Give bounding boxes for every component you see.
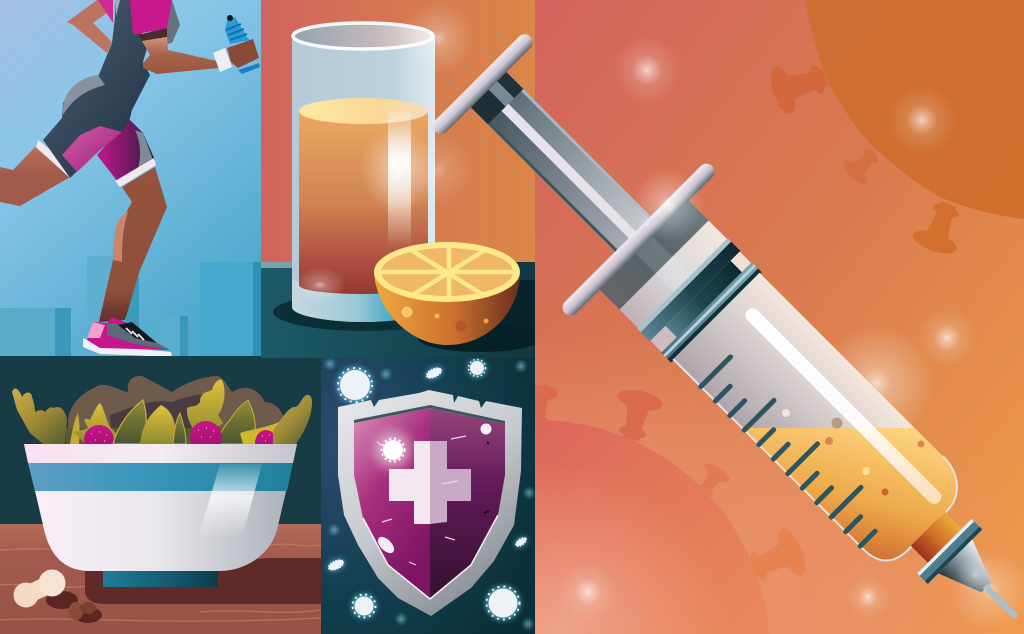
glass glow [402,2,474,206]
needle hub [917,519,1013,615]
bowl shadow [85,558,321,604]
torso suit [43,0,180,178]
water bottle [225,15,260,74]
back leg [0,147,70,206]
bowl [24,444,297,571]
bowl foot [103,571,218,587]
barrel outline [673,273,972,572]
barrel highlight [743,305,944,507]
orange half [374,240,520,345]
back leg band [36,140,70,178]
peanut [14,570,78,609]
panel: vaccine background [518,0,1024,634]
plunger head [430,31,536,137]
panel: juice glass and orange [261,0,542,358]
bubbles [782,409,924,496]
strawberry [190,421,222,444]
wooden table [0,524,321,634]
jersey sleeve [98,0,172,35]
juice [299,98,428,298]
hand [227,39,259,68]
panel: immunity shield [321,357,536,634]
panel: runner [0,0,261,358]
light sparkles [558,36,1024,630]
measurement ticks [701,357,890,546]
front arm and wristband [138,28,232,74]
glass shadow [273,300,404,331]
shield face [354,405,505,599]
leaves and strawberries [12,380,312,444]
leaves behind [68,376,283,428]
small nuts [68,602,102,623]
front leg [99,167,167,322]
finger flange [559,160,718,319]
back arm [67,0,112,53]
large virus bottom left [518,385,811,634]
table surface [261,262,535,358]
hub glare [955,555,995,595]
stopper [598,199,728,329]
flange glare [632,169,704,241]
viruses outside shield [326,359,529,620]
running shoe [83,317,172,357]
liquid [700,428,1024,634]
shield scratches [377,436,489,565]
background particles [323,357,536,631]
syringe [404,5,1024,634]
strawberry [255,430,273,444]
glass [292,23,435,322]
strawberry [84,425,114,444]
collar rings [637,238,762,363]
viruses on shield [375,424,492,556]
needle [983,584,1019,620]
shorts pink panel [62,126,122,172]
city skyline [0,256,261,358]
shield frame [338,390,522,616]
barrel glass [673,273,972,572]
panel: salad bowl [0,358,321,634]
plunger rod [465,66,651,252]
large virus top right [766,0,1024,258]
medical cross [389,441,471,524]
orange shadow [418,333,535,352]
front shorts [97,118,156,187]
barrel neck [911,512,962,563]
